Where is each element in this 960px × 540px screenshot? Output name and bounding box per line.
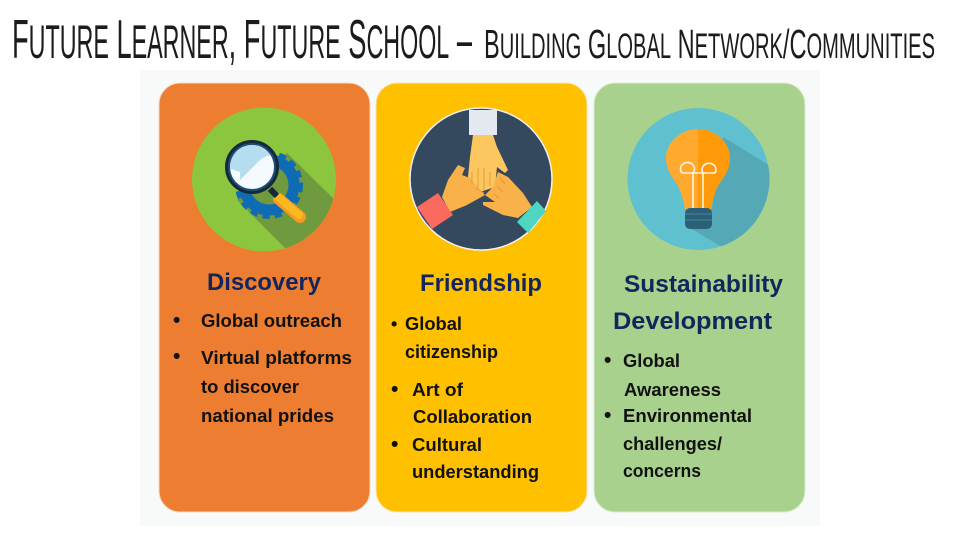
bullet list: sustainability: Awareness — [624, 380, 721, 400]
bullet list: sustainability: • — [604, 349, 611, 372]
bullet list: friendship: Art of — [412, 380, 464, 400]
heading: Friendship: Friendship — [420, 270, 542, 297]
bullet list: friendship: • — [391, 314, 397, 334]
panel: discovery — [159, 83, 370, 512]
bullet list: friendship: Global — [405, 314, 462, 334]
bullet list: friendship: citizenship — [405, 342, 498, 362]
bullet list: discovery: Virtual platforms — [201, 348, 352, 368]
heading: Discovery: Discovery — [207, 269, 322, 296]
heading: Sustainability Development — [613, 271, 784, 335]
bullet list: discovery: • — [173, 345, 180, 368]
backdrop panel — [140, 70, 820, 526]
bullet list: friendship: • — [391, 378, 398, 401]
panel: sustainability development — [594, 83, 805, 512]
bullet list: discovery — [173, 309, 352, 426]
bullet list: friendship: Cultural — [412, 435, 482, 455]
panel: friendship — [376, 83, 587, 512]
bullet list: sustainability: • — [604, 404, 611, 427]
bullet list: friendship: • — [391, 433, 398, 456]
bullet list: friendship — [391, 314, 539, 482]
bullet list: discovery: to discover — [201, 377, 299, 397]
bullet list: sustainability: concerns — [623, 461, 701, 481]
bullet list: discovery: national prides — [201, 406, 334, 426]
bullet list: sustainability — [604, 349, 752, 481]
heading: Sustainability Development: Sustainability — [624, 271, 784, 298]
heading: Sustainability Development: Development — [613, 308, 772, 335]
bullet list: discovery: • — [173, 309, 180, 332]
bullet list: friendship: understanding — [412, 462, 539, 482]
title — [12, 8, 935, 70]
bullet list: sustainability: challenges/ — [623, 434, 722, 454]
bullet list: friendship: Collaboration — [413, 407, 532, 427]
icon: joined hands — [410, 108, 552, 250]
icon: light bulb — [628, 108, 770, 250]
icon: magnifier and gear — [192, 108, 336, 252]
bullet list: sustainability: Global — [623, 351, 680, 371]
title: FUTURE LEARNER, FUTURE SCHOOL – — [12, 8, 472, 70]
bullet list: sustainability: Environmental — [623, 406, 752, 426]
bullet list: discovery: Global outreach — [201, 311, 342, 331]
